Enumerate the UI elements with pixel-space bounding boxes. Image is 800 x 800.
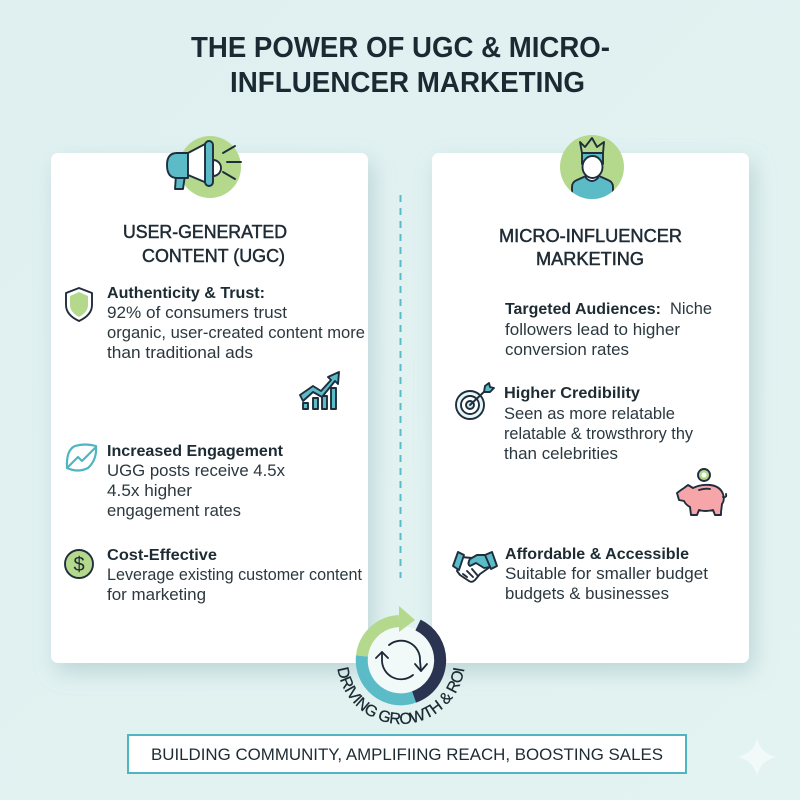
text: higher credibility: than celebrities	[504, 444, 618, 463]
title	[191, 32, 610, 99]
title: THE POWER OF UGC & MICRO-	[191, 32, 610, 64]
icon: piggy bank	[677, 469, 726, 515]
text: targeted audiences: conversion rates	[505, 340, 629, 359]
ring: teal segment	[362, 656, 414, 699]
heading: micro-influencer	[499, 226, 682, 269]
icon: dollar coin: $	[73, 554, 85, 576]
text: targeted audiences: followers lead to higher	[505, 320, 680, 339]
text: increased engagement: Increased Engagement	[107, 443, 284, 460]
icon: dollar coin	[65, 550, 93, 578]
text: cost-effective: Cost-Effective	[107, 547, 217, 564]
text: targeted audiences	[505, 299, 712, 359]
icon: handshake	[453, 552, 497, 582]
heading: micro-influencer: MARKETING	[536, 249, 644, 269]
text: affordable and accessible: budgets & businesses	[505, 584, 669, 603]
icon: shield	[66, 288, 92, 321]
text: targeted audiences: Targeted Audiences:	[505, 301, 661, 318]
heading: micro-influencer: MICRO-INFLUENCER	[499, 226, 682, 246]
banner: tagline	[128, 735, 686, 773]
ring: green segment with arrow	[362, 606, 415, 656]
text: increased engagement: 4.5x higher	[107, 481, 192, 500]
text: higher credibility: Seen as more relatable	[504, 404, 675, 423]
text: higher credibility	[504, 385, 693, 463]
divider: dashed line	[400, 195, 402, 578]
panel: user-generated content	[51, 136, 368, 663]
text: affordable and accessible	[505, 546, 708, 603]
text: authenticity and trust: than traditional ads	[107, 343, 253, 362]
icon: engagement leaf chart	[67, 444, 96, 470]
curved label: DRIVING GROWTH & ROI	[337, 667, 464, 724]
text: higher credibility: Higher Credibility	[504, 385, 640, 402]
text: authenticity and trust: organic, user-created content more	[107, 323, 365, 342]
text: cost-effective: Leverage existing customer content	[107, 565, 362, 584]
text: higher credibility: relatable & trowsthrory thy	[504, 424, 693, 443]
title: INFLUENCER MARKETING	[230, 67, 585, 99]
text: targeted audiences: Niche	[670, 299, 712, 318]
ring: navy segment	[414, 625, 440, 697]
text: affordable and accessible: Suitable for smaller budget	[505, 564, 708, 583]
inner cycle arrows	[376, 641, 427, 679]
text: cost-effective	[107, 547, 362, 604]
text: authenticity and trust: 92% of consumers trust	[107, 303, 287, 322]
icon: crowned person	[560, 135, 624, 205]
text: increased engagement	[107, 443, 285, 520]
text: increased engagement: UGG posts receive 4.5x	[107, 461, 285, 480]
heading: UGC: USER-GENERATED	[123, 222, 287, 242]
panel: micro-influencer marketing	[432, 135, 749, 663]
icon: sparkle	[738, 738, 776, 776]
text: increased engagement: engagement rates	[107, 501, 241, 520]
banner: tagline: BUILDING COMMUNITY, AMPLIFIING REACH, BOOSTING SALES	[151, 745, 663, 764]
text: authenticity and trust: Authenticity & Trust:	[107, 285, 265, 302]
heading: UGC	[123, 222, 287, 266]
icon: megaphone	[167, 136, 241, 198]
text: cost-effective: for marketing	[107, 585, 206, 604]
heading: UGC: CONTENT (UGC)	[142, 246, 285, 266]
cycle graphic: driving growth and ROI	[337, 606, 464, 724]
text: affordable and accessible: Affordable & Accessible	[505, 546, 689, 563]
text: authenticity and trust	[107, 285, 365, 362]
icon: target	[456, 383, 494, 419]
icon: growth chart	[300, 372, 339, 409]
